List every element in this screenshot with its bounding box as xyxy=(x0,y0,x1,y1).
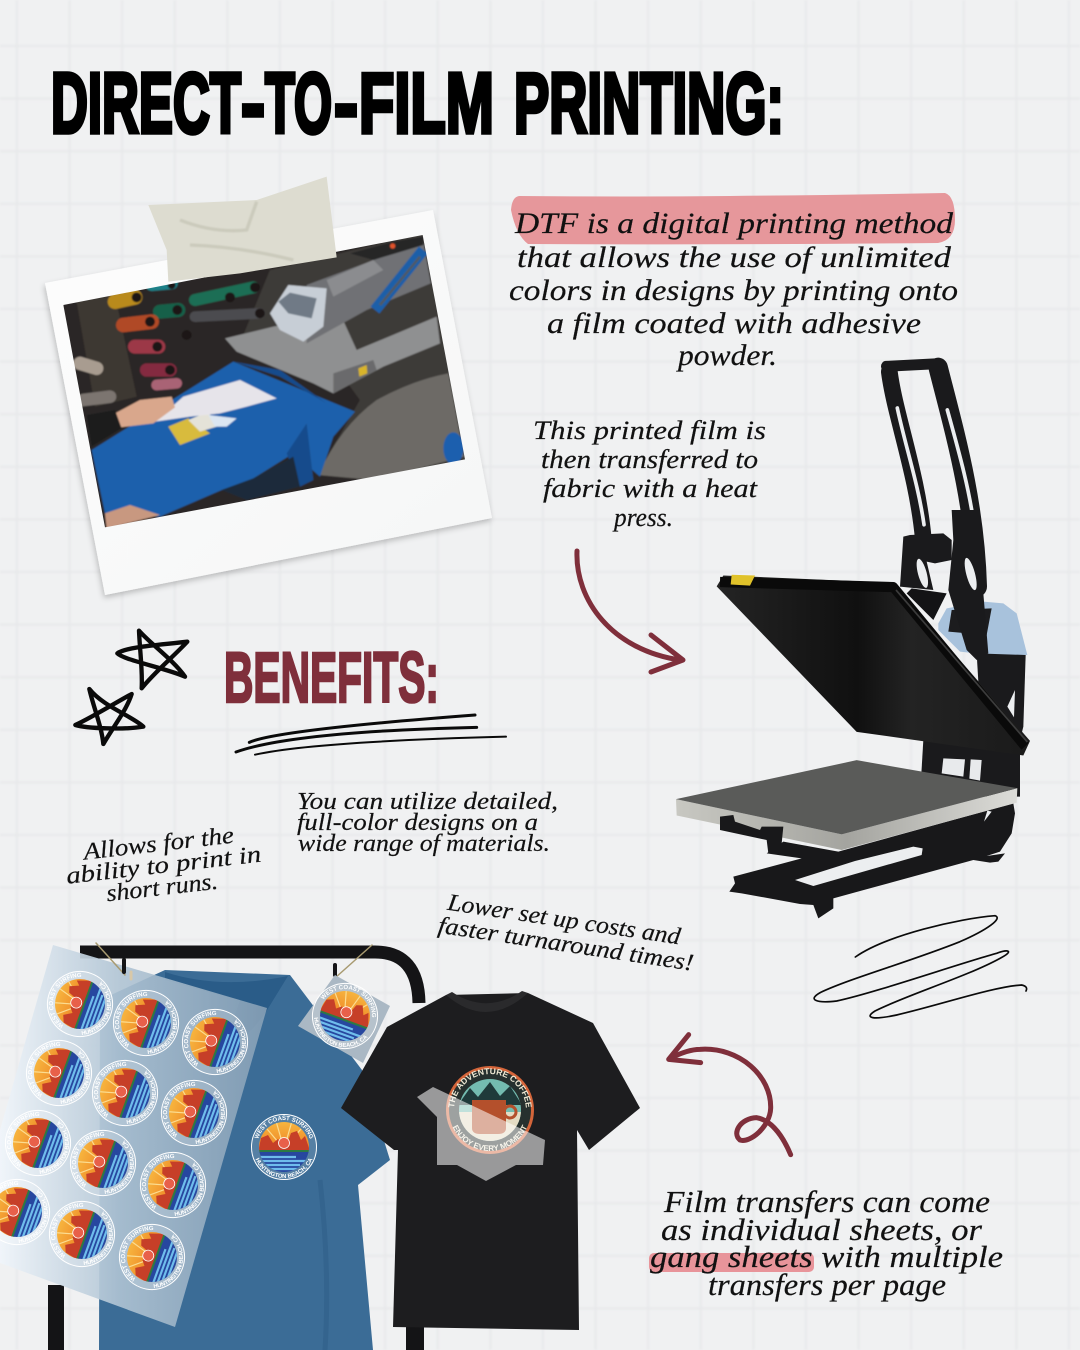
column below platen xyxy=(920,740,1020,797)
photo contents xyxy=(60,233,470,530)
tape xyxy=(148,177,337,282)
coffee logo xyxy=(446,1066,534,1154)
text: heat press transfer note: press. xyxy=(612,503,673,532)
title: DIRECT xyxy=(51,56,241,152)
lower rear frame xyxy=(977,653,1026,740)
heat press machine xyxy=(676,364,1030,918)
behind platen block xyxy=(907,588,947,620)
right plate xyxy=(948,510,988,660)
film transfer note xyxy=(649,1184,1003,1302)
title: - xyxy=(334,56,358,152)
blue housing xyxy=(938,602,1027,655)
text: detailed designs benefit: You can utilize detailed, xyxy=(297,789,558,815)
base frame xyxy=(729,803,1015,918)
arrow: up toward shirts xyxy=(669,1035,791,1155)
clips and strings xyxy=(96,943,372,979)
blue shirt on platen xyxy=(92,362,355,517)
film transfer note: gang sheets with multiple xyxy=(650,1239,1003,1274)
left plate xyxy=(900,533,952,590)
text: short runs benefit: short runs. xyxy=(105,869,219,907)
press base xyxy=(225,313,440,393)
badge on shirt xyxy=(252,1114,316,1180)
press head xyxy=(307,242,431,343)
text: lower costs benefit xyxy=(436,889,699,977)
text: short runs benefit: ability to print in xyxy=(65,842,262,890)
text: heat press transfer note: This printed film is xyxy=(533,416,766,445)
title: PRINTING: xyxy=(514,56,784,152)
title: - xyxy=(241,56,265,152)
scribble doodle xyxy=(814,916,1027,1018)
arrow: to heat press xyxy=(577,551,683,672)
film transfer note: as individual sheets, or xyxy=(661,1212,983,1247)
text: detailed designs benefit: wide range of materials. xyxy=(298,831,550,857)
text: short runs benefit xyxy=(62,820,265,912)
text: lower costs benefit: Lower set up costs and xyxy=(445,890,683,950)
benefits heading: BENEFITS: xyxy=(224,639,439,718)
text: heat press transfer note: fabric with a heat xyxy=(543,474,758,503)
coffee mug xyxy=(472,1100,506,1134)
lower platen xyxy=(676,760,1017,850)
text: detailed designs benefit: full-color designs on a xyxy=(297,810,538,836)
rear frame and blue housing xyxy=(900,510,1027,797)
text: heat press transfer note: then transferred to xyxy=(541,445,758,474)
film transfer note: transfers per page xyxy=(708,1267,946,1302)
polaroid photo of heat press with blue shirt xyxy=(45,177,492,595)
coffee logo: ENJOY EVERY MOMENT xyxy=(452,1124,526,1151)
blue t-shirt with transfer xyxy=(99,970,390,1350)
black t-shirt xyxy=(341,991,640,1330)
intro paragraph: a film coated with adhesive xyxy=(547,307,921,340)
title: TO xyxy=(265,56,332,152)
coffee logo: THE ADVENTURE COFFEE xyxy=(448,1068,532,1108)
title xyxy=(51,56,784,152)
press handle xyxy=(886,364,977,586)
intro paragraph: powder. xyxy=(676,339,777,372)
transfer sheet with twelve badges xyxy=(0,945,267,1327)
intro paragraph: DTF is a digital printing method xyxy=(514,207,954,240)
peeling film xyxy=(155,380,277,422)
gang sheets highlight xyxy=(649,1253,814,1272)
peeling film xyxy=(417,1087,545,1181)
intro paragraph xyxy=(509,193,958,372)
film sheet xyxy=(0,945,267,1327)
title: FILM xyxy=(359,56,494,152)
upper platen xyxy=(717,575,1030,755)
text: short runs benefit: Allows for the xyxy=(80,823,236,866)
intro paragraph: that allows the use of unlimited xyxy=(517,241,952,274)
lower arm xyxy=(318,373,464,480)
warning label xyxy=(731,575,755,586)
print on shirt xyxy=(168,418,210,445)
text: heat press transfer note xyxy=(533,416,766,532)
polaroid frame xyxy=(45,210,492,595)
press handle xyxy=(375,250,423,310)
front clamp xyxy=(720,815,783,853)
pink highlight xyxy=(511,193,955,244)
clothing rack xyxy=(56,952,419,1350)
press control panel xyxy=(270,285,327,342)
text: detailed designs benefit xyxy=(297,789,558,857)
hands xyxy=(115,397,175,427)
small transfer sheet xyxy=(298,974,390,1063)
intro paragraph: colors in designs by printing onto xyxy=(509,274,958,307)
underline scribble xyxy=(236,715,506,755)
stars doodle xyxy=(75,631,187,744)
text: lower costs benefit: faster turnaround times! xyxy=(436,913,695,977)
film transfer note: Film transfers can come xyxy=(663,1184,990,1219)
